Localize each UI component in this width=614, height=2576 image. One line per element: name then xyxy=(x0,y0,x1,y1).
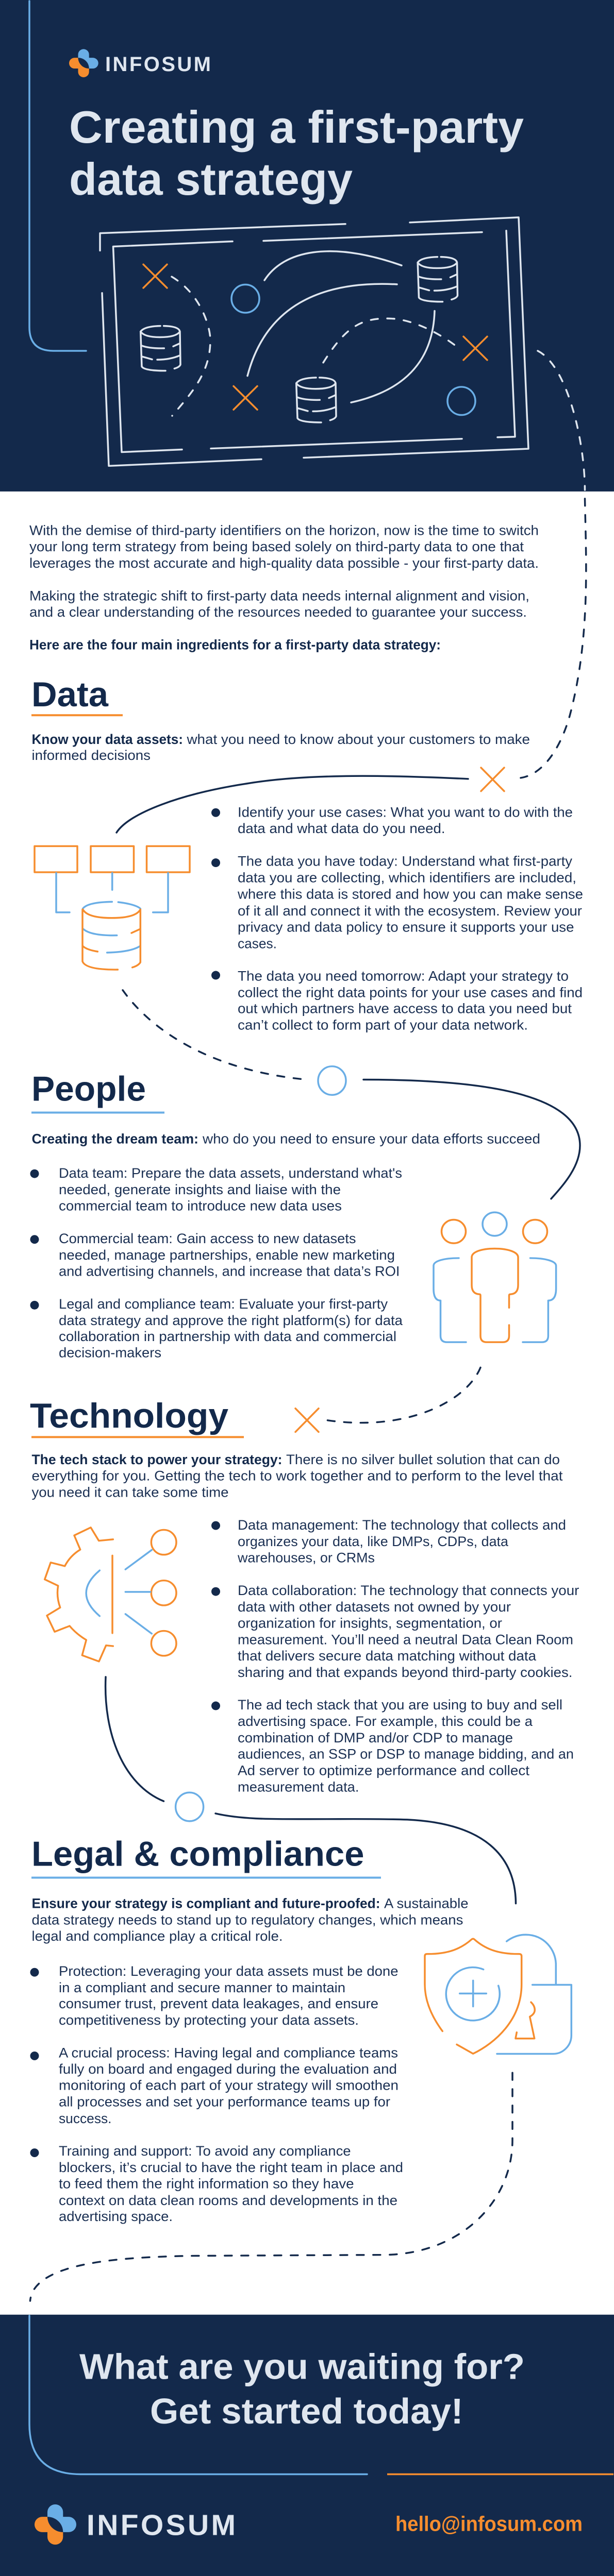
icon: data sources and database xyxy=(35,846,190,970)
legal bullet list: fully on board and engaged during the evaluation and xyxy=(59,2061,397,2077)
dashed connector to technology section xyxy=(327,1367,480,1423)
strategy board illustration xyxy=(100,217,528,466)
connector: gear to circle to shield xyxy=(106,1677,516,1904)
technology bullet list: organizes your data, like DMPs, CDPs, data xyxy=(238,1533,509,1549)
people subheading: who do you need to ensure your data efforts succeed xyxy=(202,1131,540,1147)
technology bullet list: data with other datasets not owned by your xyxy=(238,1599,511,1615)
legal subheading: legal and compliance play a critical role. xyxy=(32,1928,283,1944)
intro text: your long term strategy from being based solely on third-party data to one that xyxy=(29,538,524,554)
people bullet list: data strategy and approve the right platform(s) for data xyxy=(59,1312,403,1328)
people bullet list: and advertising channels, and increase that data’s ROI xyxy=(59,1263,400,1279)
data subheading: what you need to know about your customers to make xyxy=(186,731,530,747)
data bullet list: The data you have today: Understand what first-party xyxy=(238,853,572,869)
technology subheading: There is no silver bullet solution that can do xyxy=(286,1451,560,1467)
technology bullet list: sharing and that expands beyond third-party cookies. xyxy=(238,1664,572,1680)
legal bullet list: context on data clean rooms and developments in the xyxy=(59,2192,397,2208)
technology bullet list: organization for insights, segmentation, or xyxy=(238,1615,502,1631)
intro text: With the demise of third-party identifiers on the horizon, now is the time to switch xyxy=(29,522,539,538)
data bullet list: data you are collecting, which identifiers are included, xyxy=(238,869,576,885)
title xyxy=(69,101,524,205)
icon: orange cross near Technology xyxy=(295,1409,319,1432)
intro text: leverages the most accurate and high-quality data possible - your first-party data. xyxy=(29,555,539,571)
data bullet list: privacy and data policy to ensure it supports your use xyxy=(238,919,574,935)
technology subheading xyxy=(32,1451,563,1500)
panel: legal and compliance xyxy=(30,1835,571,2224)
panel: footer call to action xyxy=(0,2315,614,2576)
technology bullet list: The ad tech stack that you are using to buy and sell xyxy=(238,1697,562,1713)
people bullet list: Data team: Prepare the data assets, understand what's xyxy=(59,1165,402,1181)
people bullet list: collaboration in partnership with data and commercial xyxy=(59,1328,396,1344)
technology bullet list: measurement. You’ll need a neutral Data Clean Room xyxy=(238,1631,573,1647)
people bullet list: Legal and compliance team: Evaluate your first-party xyxy=(59,1296,388,1312)
data bullet list: of it all and connect it with the ecosystem. Review your xyxy=(238,903,582,919)
technology bullet list: measurement data. xyxy=(238,1778,359,1794)
blue circles xyxy=(231,284,475,415)
legal bullet list: competitiveness by protecting your data assets. xyxy=(59,2012,359,2028)
technology bullet list: advertising space. For example, this could be a xyxy=(238,1713,533,1729)
technology bullet list: Data management: The technology that collects and xyxy=(238,1517,566,1533)
call to action text: What are you waiting for? xyxy=(79,2347,525,2386)
technology bullet list: combination of DMP and/or CDP to manage xyxy=(238,1730,513,1745)
data bullet list: data and what data do you need. xyxy=(238,820,445,836)
data subheading: Know your data assets: xyxy=(32,731,183,747)
dashed connector to people section xyxy=(123,990,302,1079)
data bullet list: The data you need tomorrow: Adapt your strategy to xyxy=(238,968,569,984)
hero corner line xyxy=(29,1,86,351)
dashed connector in hero xyxy=(538,351,585,490)
legal subheading: Ensure your strategy is compliant and future-proofed: xyxy=(32,1895,380,1911)
panel: people xyxy=(30,1070,556,1360)
panel: data xyxy=(31,675,583,1033)
people bullet list xyxy=(30,1165,403,1360)
technology bullet list: warehouses, or CRMs xyxy=(237,1550,375,1566)
title: Creating a first-party xyxy=(69,101,524,152)
legal subheading xyxy=(32,1895,468,1944)
call to action text xyxy=(79,2347,525,2431)
legal bullet list: all processes and set your performance teams up for xyxy=(59,2094,390,2110)
technology subheading: The tech stack to power your strategy: xyxy=(32,1451,283,1467)
intro text xyxy=(29,522,539,653)
data subheading: informed decisions xyxy=(32,747,151,763)
technology subheading: you need it can take some time xyxy=(32,1484,229,1500)
data subheading xyxy=(32,731,530,763)
legal bullet list: A crucial process: Having legal and compliance teams xyxy=(59,2045,398,2060)
orange crosses xyxy=(143,264,487,410)
people subheading xyxy=(32,1131,540,1147)
legal bullet list: Protection: Leveraging your data assets must be done xyxy=(59,1963,398,1979)
contact email: hello@infosum.com xyxy=(395,2512,583,2536)
legal bullet list: advertising space. xyxy=(59,2208,173,2224)
technology bullet list: Ad server to optimize performance and collect xyxy=(238,1762,529,1778)
legal bullet list: to feed them the right information so they have xyxy=(59,2176,354,2192)
panel: technology xyxy=(30,1397,579,1794)
dashed connector to footer xyxy=(30,2073,512,2301)
intro text: Here are the four main ingredients for a first-party data strategy: xyxy=(29,637,441,653)
people bullet list: Commercial team: Gain access to new datasets xyxy=(59,1230,356,1246)
people bullet list: needed, manage partnerships, enable new marketing xyxy=(59,1247,395,1263)
logo: InfoSum header: INFOSUM xyxy=(105,53,211,76)
database icons xyxy=(141,257,458,422)
heading: Legal & compliance: Legal & compliance xyxy=(31,1835,364,1874)
title: data strategy xyxy=(69,154,353,205)
intro text: and a clear understanding of the resources needed to guarantee your success. xyxy=(29,604,527,620)
technology bullet list: that delivers secure data matching without data xyxy=(238,1648,537,1664)
technology bullet list: audiences, an SSP or DSP to manage bidding, and an xyxy=(238,1746,574,1762)
heading: Data: Data xyxy=(31,675,109,714)
legal bullet list xyxy=(30,1963,403,2224)
dashed connector to data section xyxy=(521,499,586,778)
legal bullet list: consumer trust, prevent data leakages, and ensure xyxy=(59,1995,378,2011)
heading: Technology: Technology xyxy=(30,1397,228,1435)
data bullet list: can’t collect to form part of your data network. xyxy=(238,1017,528,1033)
intro text: Making the strategic shift to first-party data needs internal alignment and vision, xyxy=(29,587,529,603)
people bullet list: decision-makers xyxy=(59,1345,161,1360)
icon: shield and padlock xyxy=(425,1935,571,2054)
legal bullet list: Training and support: To avoid any compliance xyxy=(59,2143,351,2159)
connector: cross and curve into data icon xyxy=(117,768,504,833)
technology bullet list xyxy=(211,1517,579,1794)
people bullet list: needed, generate insights and liaise with the xyxy=(59,1181,341,1197)
play curves xyxy=(172,251,456,416)
legal subheading: A sustainable xyxy=(384,1895,469,1911)
people bullet list: commercial team to introduce new data uses xyxy=(59,1198,342,1214)
legal bullet list: blockers, it’s crucial to have the right team in place and xyxy=(59,2159,403,2175)
call to action text: Get started today! xyxy=(150,2391,463,2431)
logo: InfoSum header xyxy=(69,49,211,77)
footer blue and orange lines xyxy=(29,2316,613,2474)
icon: gear with connected nodes xyxy=(45,1528,176,1662)
logo: InfoSum footer: INFOSUM xyxy=(87,2509,236,2541)
connector: circle and curve to people icon xyxy=(318,1066,580,1199)
data bullet list xyxy=(211,804,583,1033)
legal bullet list: monitoring of each part of your strategy will smoothen xyxy=(59,2077,399,2093)
heading: People: People xyxy=(31,1070,146,1109)
technology subheading: everything for you. Getting the tech to work together and to perform to the level that xyxy=(32,1468,563,1484)
data bullet list: Identify your use cases: What you want to do with the xyxy=(238,804,573,820)
legal bullet list: success. xyxy=(59,2110,111,2126)
icon: team of three people xyxy=(434,1212,556,1342)
legal subheading: data strategy needs to stand up to regulatory changes, which means xyxy=(32,1911,463,1927)
data bullet list: out which partners have access to data you need but xyxy=(238,1001,572,1016)
data bullet list: where this data is stored and how you can make sense xyxy=(237,886,583,902)
data bullet list: cases. xyxy=(238,935,277,951)
panel: hero header xyxy=(0,0,614,492)
legal bullet list: in a compliant and secure manner to maintain xyxy=(59,1979,345,1995)
technology bullet list: Data collaboration: The technology that connects your xyxy=(238,1582,579,1598)
people subheading: Creating the dream team: xyxy=(32,1131,198,1147)
logo: InfoSum footer xyxy=(35,2504,236,2545)
data bullet list: collect the right data points for your use cases and find xyxy=(238,985,583,1001)
